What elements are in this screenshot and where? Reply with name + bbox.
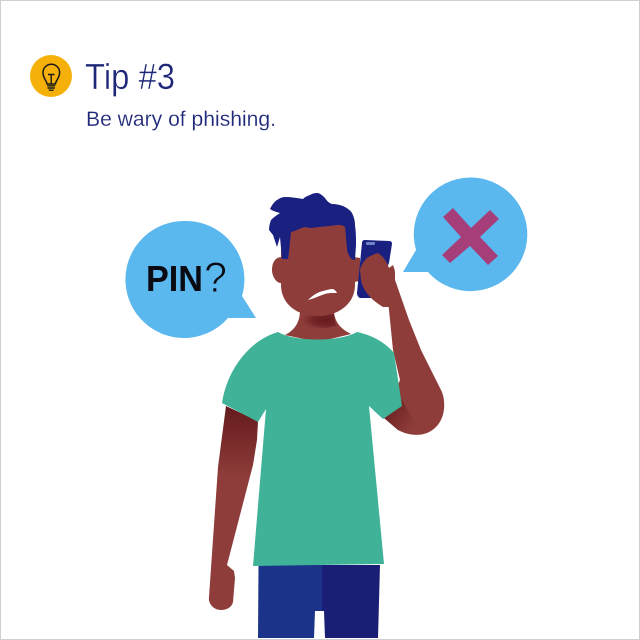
ears bbox=[272, 257, 360, 283]
neck bbox=[285, 310, 351, 342]
question mark: ? bbox=[204, 254, 227, 302]
mouth bbox=[308, 289, 337, 300]
header bbox=[30, 55, 276, 131]
subtitle: Be wary of phishing. bbox=[86, 108, 276, 131]
raised arm bbox=[384, 280, 444, 435]
man on the phone bbox=[209, 193, 444, 638]
t-shirt bbox=[222, 332, 402, 566]
neck shadow bbox=[298, 314, 337, 328]
left arm bbox=[209, 406, 258, 610]
PIN text: PIN bbox=[146, 258, 203, 299]
title: Tip #3 bbox=[85, 56, 175, 97]
icon: light bulb bbox=[30, 55, 72, 97]
trousers bbox=[258, 565, 380, 638]
hair bbox=[269, 193, 356, 260]
forearm shadow bbox=[384, 400, 420, 433]
head bbox=[281, 224, 355, 316]
speech bubble: PIN question bbox=[125, 221, 256, 338]
speech bubble: rejection cross bbox=[403, 177, 527, 291]
hand bbox=[360, 253, 405, 310]
icon: cross bbox=[442, 208, 499, 265]
phone bbox=[357, 240, 392, 298]
